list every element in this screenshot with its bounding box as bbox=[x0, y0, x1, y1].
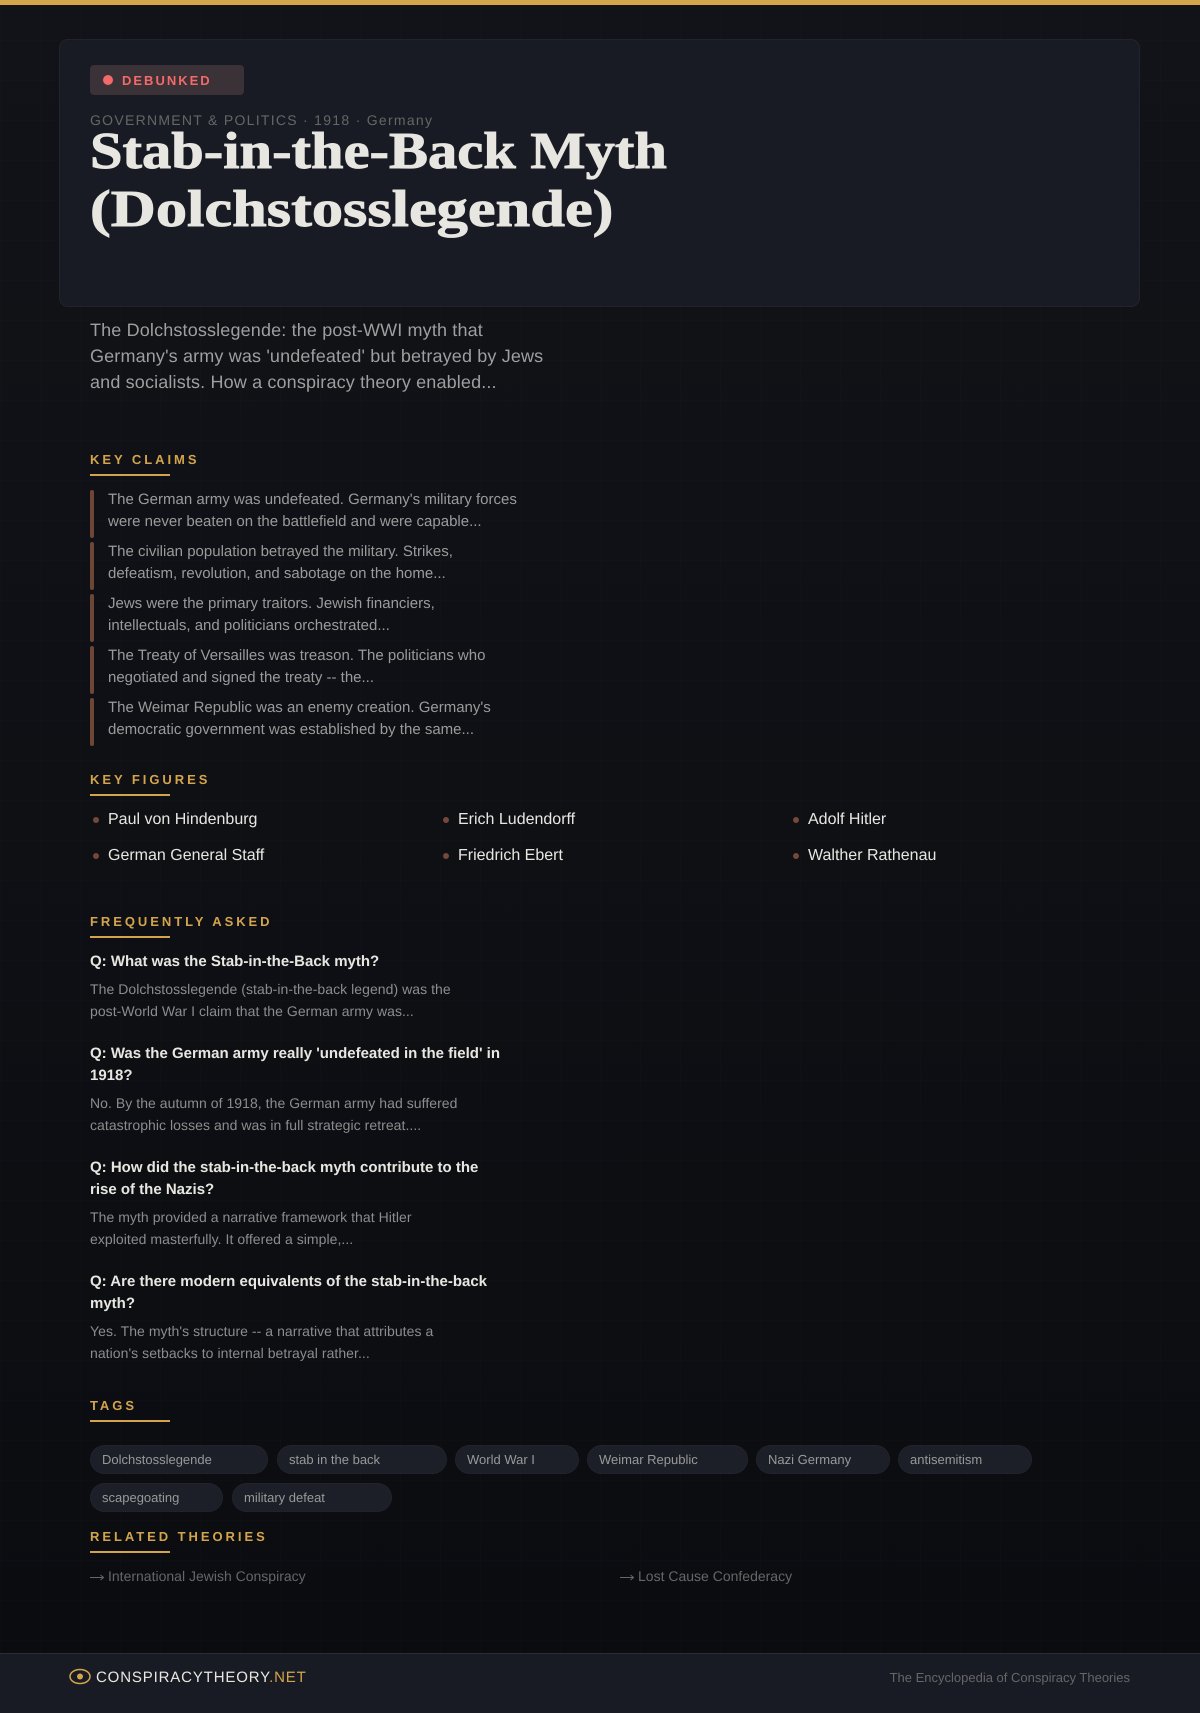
faq item 3: rise of the Nazis? bbox=[90, 1181, 214, 1198]
icon: status dot bbox=[103, 75, 113, 85]
claim 3: Jews were the primary traitors. Jewish financiers, bbox=[108, 595, 435, 612]
claim 3 bbox=[90, 594, 435, 642]
heading: frequently asked: FREQUENTLY ASKED bbox=[90, 914, 273, 929]
claim 4: The Treaty of Versailles was treason. The politicians who bbox=[108, 647, 485, 664]
faq item 2: Q: Was the German army really 'undefeated in the field' in bbox=[90, 1045, 500, 1062]
icon: arrow bbox=[90, 1574, 104, 1580]
figure: German General Staff: German General Staff bbox=[108, 847, 264, 864]
title: (Dolchstosslegende) bbox=[90, 181, 613, 238]
panel: hero header bbox=[59, 39, 1140, 307]
faq item 4: Yes. The myth's structure -- a narrative that attributes a bbox=[90, 1323, 433, 1339]
claim 2: defeatism, revolution, and sabotage on the home... bbox=[108, 565, 446, 582]
faq item 2: 1918? bbox=[90, 1067, 133, 1084]
claim 1: were never beaten on the battlefield and were capable... bbox=[108, 513, 482, 530]
heading: related theories: RELATED THEORIES bbox=[90, 1529, 268, 1544]
intro summary bbox=[90, 320, 543, 392]
faq item 4: myth? bbox=[90, 1295, 135, 1312]
claim 5 bbox=[90, 698, 491, 746]
faq item 2: No. By the autumn of 1918, the German army had suffered bbox=[90, 1095, 457, 1111]
figure: Walther Rathenau: Walther Rathenau bbox=[808, 847, 936, 864]
footer bbox=[0, 1653, 1200, 1713]
faq item 2: catastrophic losses and was in full strategic retreat.... bbox=[90, 1117, 421, 1133]
faq item 4 bbox=[90, 1273, 487, 1361]
claim 1: The German army was undefeated. Germany's military forces bbox=[108, 491, 517, 508]
heading: key claims: KEY CLAIMS bbox=[90, 452, 199, 467]
claim 5: democratic government was established by the same... bbox=[108, 721, 474, 738]
tag: antisemitism bbox=[910, 1452, 982, 1467]
heading: key figures: KEY FIGURES bbox=[90, 772, 210, 787]
heading: tags: TAGS bbox=[90, 1398, 137, 1413]
status badge: debunked bbox=[90, 65, 244, 95]
faq item 1 bbox=[90, 953, 451, 1019]
figure: Erich Ludendorff: Erich Ludendorff bbox=[458, 811, 575, 828]
faq item 1: post-World War I claim that the German army was... bbox=[90, 1003, 414, 1019]
faq item 3 bbox=[90, 1159, 478, 1247]
category and date line: GOVERNMENT & POLITICS · 1918 · Germany bbox=[90, 112, 433, 128]
title bbox=[90, 123, 667, 238]
tag: World War I bbox=[467, 1452, 535, 1467]
claim 5: The Weimar Republic was an enemy creation. Germany's bbox=[108, 699, 491, 716]
tag: military defeat bbox=[244, 1490, 325, 1505]
panel: key figures bbox=[90, 772, 936, 864]
title: Stab-in-the-Back Myth bbox=[90, 123, 667, 180]
intro summary: and socialists. How a conspiracy theory enabled... bbox=[90, 372, 497, 392]
tag bbox=[587, 1445, 748, 1474]
tag: Nazi Germany bbox=[768, 1452, 851, 1467]
figure: Friedrich Ebert: Friedrich Ebert bbox=[458, 847, 563, 864]
badge label: DEBUNKED bbox=[122, 73, 212, 88]
faq item 1: Q: What was the Stab-in-the-Back myth? bbox=[90, 953, 379, 970]
tag: Dolchstosslegende bbox=[102, 1452, 212, 1467]
claim 3: intellectuals, and politicians orchestrated... bbox=[108, 617, 390, 634]
tag bbox=[90, 1483, 223, 1512]
related link: International Jewish Conspiracy bbox=[108, 1568, 306, 1584]
panel: frequently asked bbox=[90, 914, 500, 1361]
tag bbox=[756, 1445, 890, 1474]
tag bbox=[90, 1445, 268, 1474]
faq item 4: Q: Are there modern equivalents of the stab-in-the-back bbox=[90, 1273, 487, 1290]
tag bbox=[455, 1445, 579, 1474]
faq item 4: nation's setbacks to internal betrayal rather... bbox=[90, 1345, 370, 1361]
faq item 2 bbox=[90, 1045, 500, 1133]
claim 1 bbox=[90, 490, 517, 538]
tag bbox=[232, 1483, 392, 1512]
tag bbox=[277, 1445, 447, 1474]
faq item 3: Q: How did the stab-in-the-back myth contribute to the bbox=[90, 1159, 478, 1176]
tag: stab in the back bbox=[289, 1452, 380, 1467]
claim 4 bbox=[90, 646, 485, 694]
panel: tags bbox=[90, 1398, 1032, 1512]
faq item 3: exploited masterfully. It offered a simple,... bbox=[90, 1231, 353, 1247]
figure: Paul von Hindenburg: Paul von Hindenburg bbox=[108, 811, 257, 828]
tag: scapegoating bbox=[102, 1490, 179, 1505]
panel: related theories bbox=[90, 1529, 792, 1584]
figure: Adolf Hitler: Adolf Hitler bbox=[808, 811, 886, 828]
top accent bar bbox=[0, 0, 1200, 5]
faq item 1: The Dolchstosslegende (stab-in-the-back legend) was the bbox=[90, 981, 451, 997]
claim 4: negotiated and signed the treaty -- the... bbox=[108, 669, 374, 686]
claim 2: The civilian population betrayed the military. Strikes, bbox=[108, 543, 453, 560]
icon: arrow bbox=[620, 1574, 634, 1580]
icon: eye logo bbox=[69, 1668, 91, 1684]
intro summary: The Dolchstosslegende: the post-WWI myth that bbox=[90, 320, 483, 340]
claim 2 bbox=[90, 542, 453, 590]
panel: key claims bbox=[90, 452, 517, 746]
brand name: CONSPIRACYTHEORY.NET bbox=[96, 1669, 307, 1686]
tag: Weimar Republic bbox=[599, 1452, 698, 1467]
tagline: The Encyclopedia of Conspiracy Theories bbox=[890, 1670, 1130, 1685]
tag bbox=[898, 1445, 1032, 1474]
intro summary: Germany's army was 'undefeated' but betrayed by Jews bbox=[90, 346, 543, 366]
related link: Lost Cause Confederacy bbox=[638, 1568, 792, 1584]
faq item 3: The myth provided a narrative framework that Hitler bbox=[90, 1209, 412, 1225]
